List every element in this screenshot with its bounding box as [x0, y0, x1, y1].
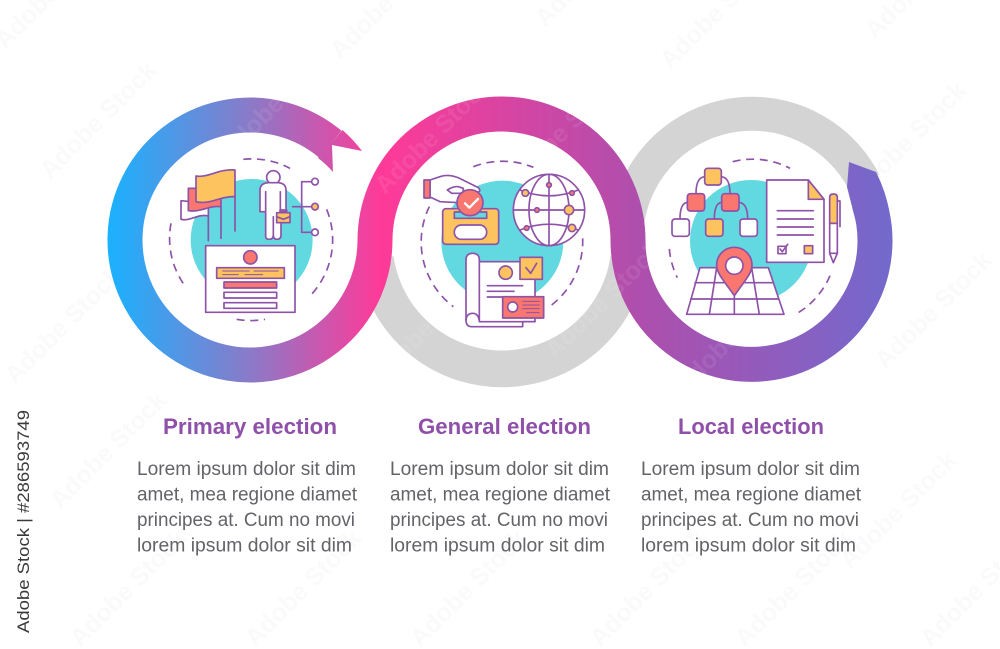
column: local election [641, 414, 862, 556]
heading: Primary election [163, 414, 337, 439]
scroll document [466, 253, 544, 327]
pen [830, 194, 840, 263]
ballot box with hand [424, 175, 499, 244]
column: general election [390, 414, 611, 556]
ribbon watermark: Adobe Stock [499, 66, 627, 194]
background watermark: Adobe Stock [44, 386, 172, 514]
background watermark: Adobe Stock [34, 56, 162, 184]
background watermark: Adobe Stock [239, 524, 367, 649]
ballot form board [206, 246, 295, 312]
body text: lorem ipsum dolor sit dim [641, 536, 856, 556]
ribbon watermark: Adobe Stock [669, 271, 797, 399]
body text [137, 459, 358, 556]
white inner disc of middle ring [392, 132, 612, 350]
body text: amet, mea regione diamet [641, 484, 862, 506]
body text: principes at. Cum no movi [641, 510, 859, 531]
body text: Lorem ipsum dolor sit dim [137, 459, 356, 480]
person with briefcase [260, 171, 290, 239]
body text: principes at. Cum no movi [137, 510, 355, 531]
checklist document [767, 180, 824, 262]
ribbon watermark [214, 36, 797, 399]
heading: General election [418, 414, 591, 439]
teal backdrop circle [191, 179, 313, 301]
ribbon watermark: Adobe Stock [539, 236, 667, 364]
body text: principes at. Cum no movi [390, 510, 608, 531]
background watermark: Adobe Stock [729, 524, 857, 649]
connector nodes [293, 178, 318, 236]
background watermark: Adobe Stock [64, 524, 192, 649]
icon: primary election [170, 159, 333, 321]
ribbon watermark: Adobe Stock [364, 261, 492, 389]
body text [641, 459, 862, 556]
map with location pin [687, 247, 784, 314]
dashed orbit [421, 161, 583, 307]
body text: amet, mea regione diamet [390, 484, 611, 506]
background watermark: Adobe Stock [404, 524, 532, 649]
org chart [672, 168, 757, 236]
flags [181, 170, 235, 241]
globe [513, 174, 585, 246]
icon: general election [421, 161, 585, 327]
grey ring segments [376, 114, 864, 369]
background watermark: Adobe Stock [869, 246, 997, 374]
body text: lorem ipsum dolor sit dim [390, 536, 605, 556]
teal backdrop circle [441, 181, 563, 303]
background watermark: Adobe Stock [584, 524, 712, 649]
icon: local election [669, 159, 840, 314]
body text: amet, mea regione diamet [137, 484, 358, 506]
body text: lorem ipsum dolor sit dim [137, 536, 352, 556]
ribbon watermark: Adobe Stock [369, 71, 497, 199]
background watermark: Adobe Stock [0, 261, 127, 389]
ribbon watermark: Adobe Stock [214, 36, 342, 164]
teal backdrop circle [690, 180, 812, 302]
body text: Lorem ipsum dolor sit dim [641, 459, 860, 480]
background watermark: Adobe Stock [834, 446, 962, 574]
background watermark: Adobe Stock [844, 76, 972, 204]
gradient ribbon with arrow [125, 114, 889, 365]
dashed orbit [170, 159, 333, 321]
dashed orbit [669, 159, 830, 313]
vertical stock credit: Adobe Stock | #286593749 [14, 410, 33, 633]
body text [390, 459, 611, 556]
heading: Local election [678, 414, 824, 439]
column: primary election [137, 414, 358, 556]
body text: Lorem ipsum dolor sit dim [390, 459, 609, 480]
